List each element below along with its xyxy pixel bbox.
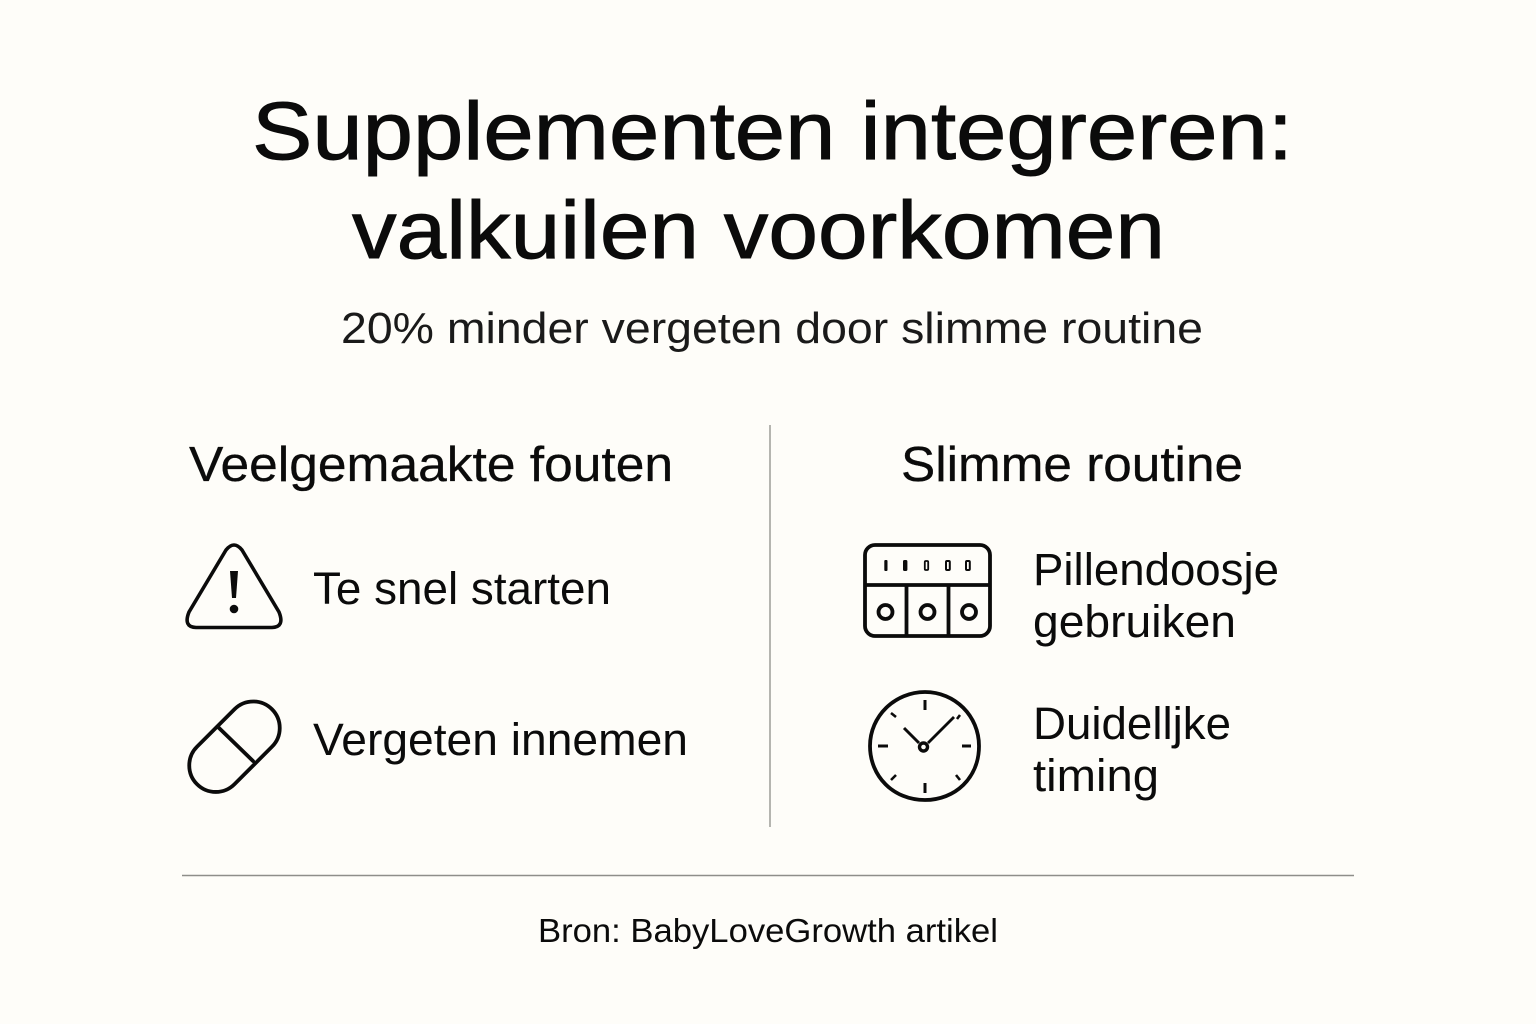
title: valkuilen voorkomen bbox=[352, 185, 1165, 276]
label: Vergeten innemen: Vergeten innemen bbox=[313, 714, 688, 765]
label: Te snel starten: Te snel starten bbox=[313, 563, 611, 614]
label: Pillendoosje gebruiken bbox=[1033, 544, 1279, 647]
label: Pillendoosje gebruiken: Pillendoosje bbox=[1033, 544, 1279, 595]
icon: pill organizer bbox=[865, 545, 990, 636]
subtitle: 20% minder vergeten door slimme routine bbox=[341, 304, 1203, 353]
icon: warning triangle bbox=[187, 545, 281, 628]
title: Supplementen integreren: bbox=[252, 86, 1293, 177]
source note: Bron: BabyLoveGrowth artikel bbox=[538, 912, 998, 949]
label: Duidelljke timing bbox=[1033, 698, 1231, 801]
label: Duidelljke timing: Duidelljke bbox=[1033, 698, 1231, 749]
heading: Veelgemaakte fouten: Veelgemaakte fouten bbox=[189, 438, 673, 492]
icon: capsule bbox=[178, 690, 291, 803]
label: Duidelljke timing: timing bbox=[1033, 750, 1159, 801]
label: Pillendoosje gebruiken: gebruiken bbox=[1033, 596, 1236, 647]
title bbox=[252, 86, 1293, 276]
icon: clock bbox=[870, 692, 979, 800]
heading: Slimme routine: Slimme routine bbox=[901, 438, 1243, 492]
